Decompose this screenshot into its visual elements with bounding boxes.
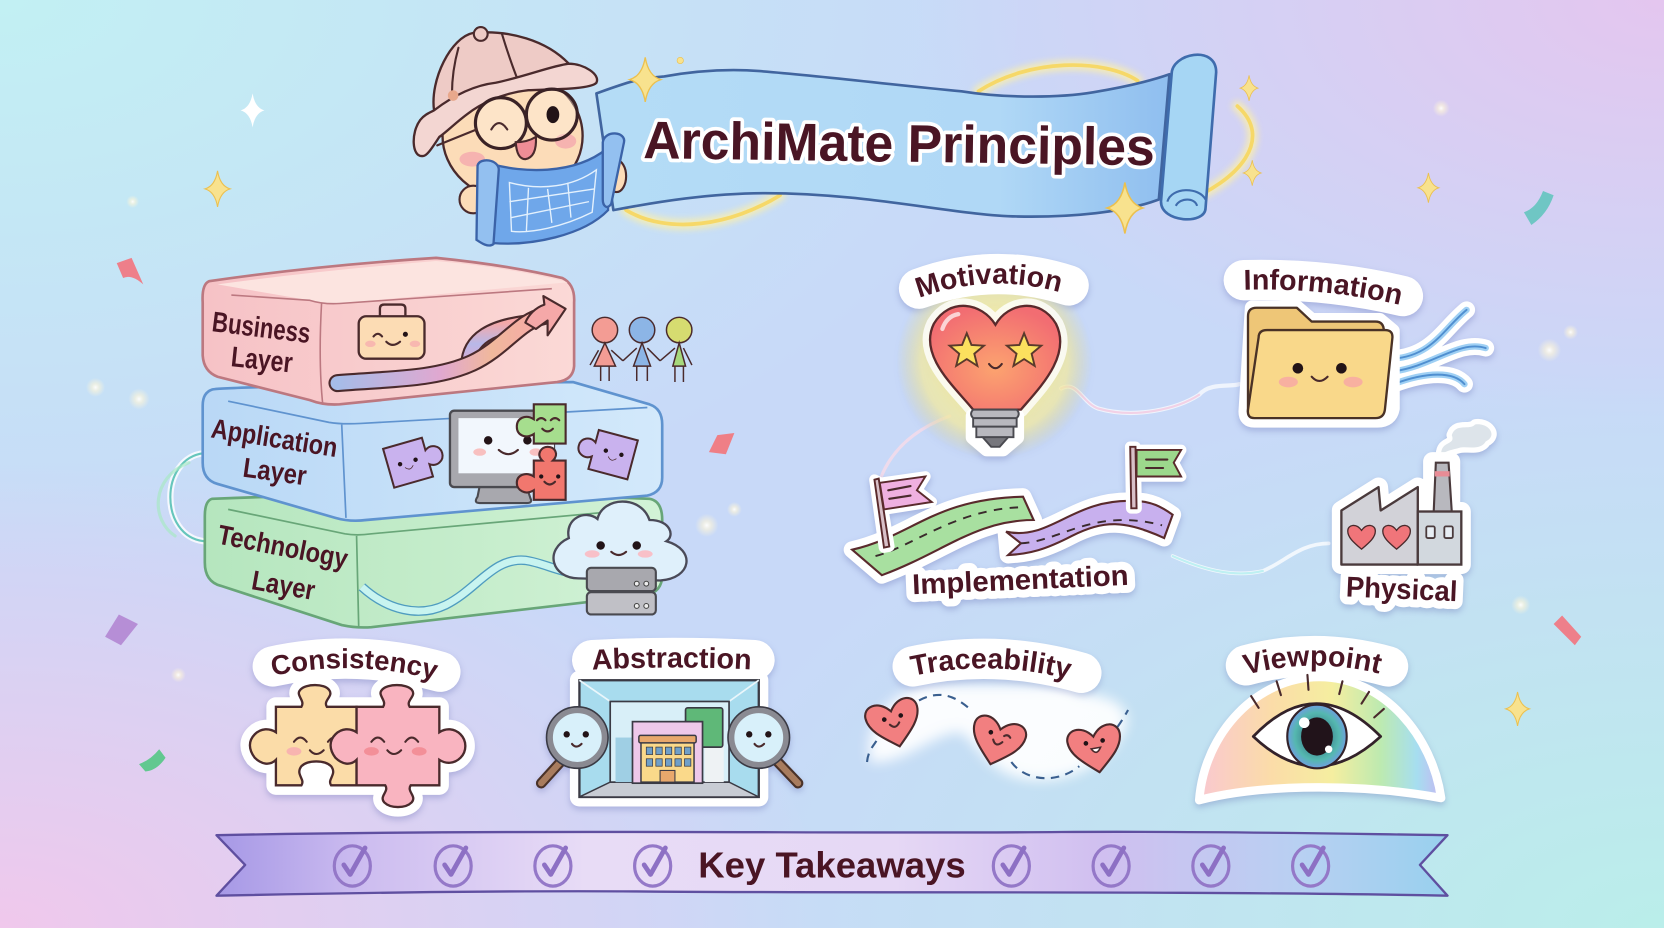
icon: yellow puzzle [250, 685, 357, 785]
glow [897, 263, 1092, 458]
icon: right magnifier [728, 707, 798, 783]
frame [579, 680, 759, 797]
label: Motivation [914, 264, 1061, 298]
icon: folder [1246, 308, 1392, 420]
label halo [592, 658, 755, 660]
gold swirl [626, 65, 1253, 224]
icon: smoke [1441, 424, 1491, 454]
label: Information [1245, 268, 1401, 304]
glasses and face [475, 98, 526, 149]
icon: pink flag [874, 476, 932, 548]
check icons [334, 846, 1329, 886]
building card [686, 708, 723, 747]
icon: left magnifier [541, 707, 608, 783]
label halo [919, 274, 1069, 289]
icon: pink puzzle [331, 685, 465, 807]
hard hat [433, 32, 569, 110]
blueprint scroll [492, 149, 608, 244]
technology wave [362, 560, 573, 611]
label: Abstraction [592, 647, 750, 670]
icon: puzzle halo [250, 685, 465, 807]
banner sparkles [630, 57, 1261, 233]
connector lines [158, 384, 1329, 573]
icon: factory [1341, 462, 1461, 565]
title banner scroll [596, 55, 1261, 233]
icon: purple puzzle left [383, 434, 448, 488]
panel: technology layer [205, 495, 662, 627]
icon: rainbow dome [1199, 677, 1441, 800]
sticker: traceability [864, 638, 1132, 786]
icon: heart two [965, 713, 1029, 771]
icon: heart lightbulb [930, 306, 1060, 449]
key takeaways ribbon [216, 832, 1448, 896]
icon: eye [1251, 675, 1384, 768]
panel: business layer: Layer [230, 341, 294, 380]
sticker: physical [1341, 424, 1491, 608]
banner roll [1161, 55, 1216, 219]
head [443, 72, 583, 200]
decorative sparkles and confetti [86, 93, 1581, 772]
label: Physical [1345, 571, 1458, 608]
label: Traceability [909, 648, 1072, 682]
panel: application layer [203, 382, 662, 521]
icon: cloud with server [554, 502, 687, 614]
label: Consistency [272, 648, 438, 683]
panel: business layer [203, 258, 574, 405]
label halo [1244, 280, 1403, 296]
dashed trace [867, 695, 1128, 778]
soft white glow [869, 684, 1127, 780]
sticker: viewpoint [1192, 636, 1448, 810]
icon: heart three [1066, 723, 1126, 777]
sticker: consistency [238, 638, 478, 822]
left loop [170, 453, 204, 541]
label: Viewpoint [1242, 647, 1382, 674]
panel: technology layer: Layer [249, 564, 318, 606]
icon: green road [852, 497, 1173, 575]
icon: rainbow growth arrow [337, 296, 566, 383]
icon: purple puzzle right [574, 426, 638, 479]
sticker: motivation [896, 254, 1091, 462]
sticker: information [1222, 260, 1496, 434]
business label: Business [210, 306, 312, 350]
technology label: Technology [215, 519, 351, 574]
icon: green puzzle [517, 404, 566, 444]
icon: heart one [863, 696, 925, 753]
label: Implementation [912, 560, 1129, 601]
icon: blue data swooshes [1393, 310, 1486, 384]
ribbon text: Key Takeaways [698, 845, 966, 886]
label halo [273, 659, 440, 672]
icon: three people holding hands [590, 317, 692, 382]
icon: red puzzle [517, 447, 566, 500]
panel: application layer: Layer [241, 452, 309, 491]
icon: computer monitor [450, 411, 554, 503]
application label: Application [209, 413, 340, 463]
hands [460, 186, 487, 213]
mascot with hard hat holding blueprint [414, 27, 626, 246]
icon: briefcase [359, 305, 424, 359]
ribbon shape [216, 832, 1448, 896]
banner ribbon [596, 70, 1169, 217]
icon: green flag [1130, 447, 1181, 508]
label halo [913, 659, 1081, 673]
icon: purple road [1006, 501, 1173, 555]
architecture layer stack [203, 258, 692, 627]
sticker: implementation [852, 447, 1181, 601]
label halo [1246, 656, 1388, 666]
sticker: abstraction [534, 638, 805, 812]
title text: ArchiMate Principles [643, 111, 1155, 177]
